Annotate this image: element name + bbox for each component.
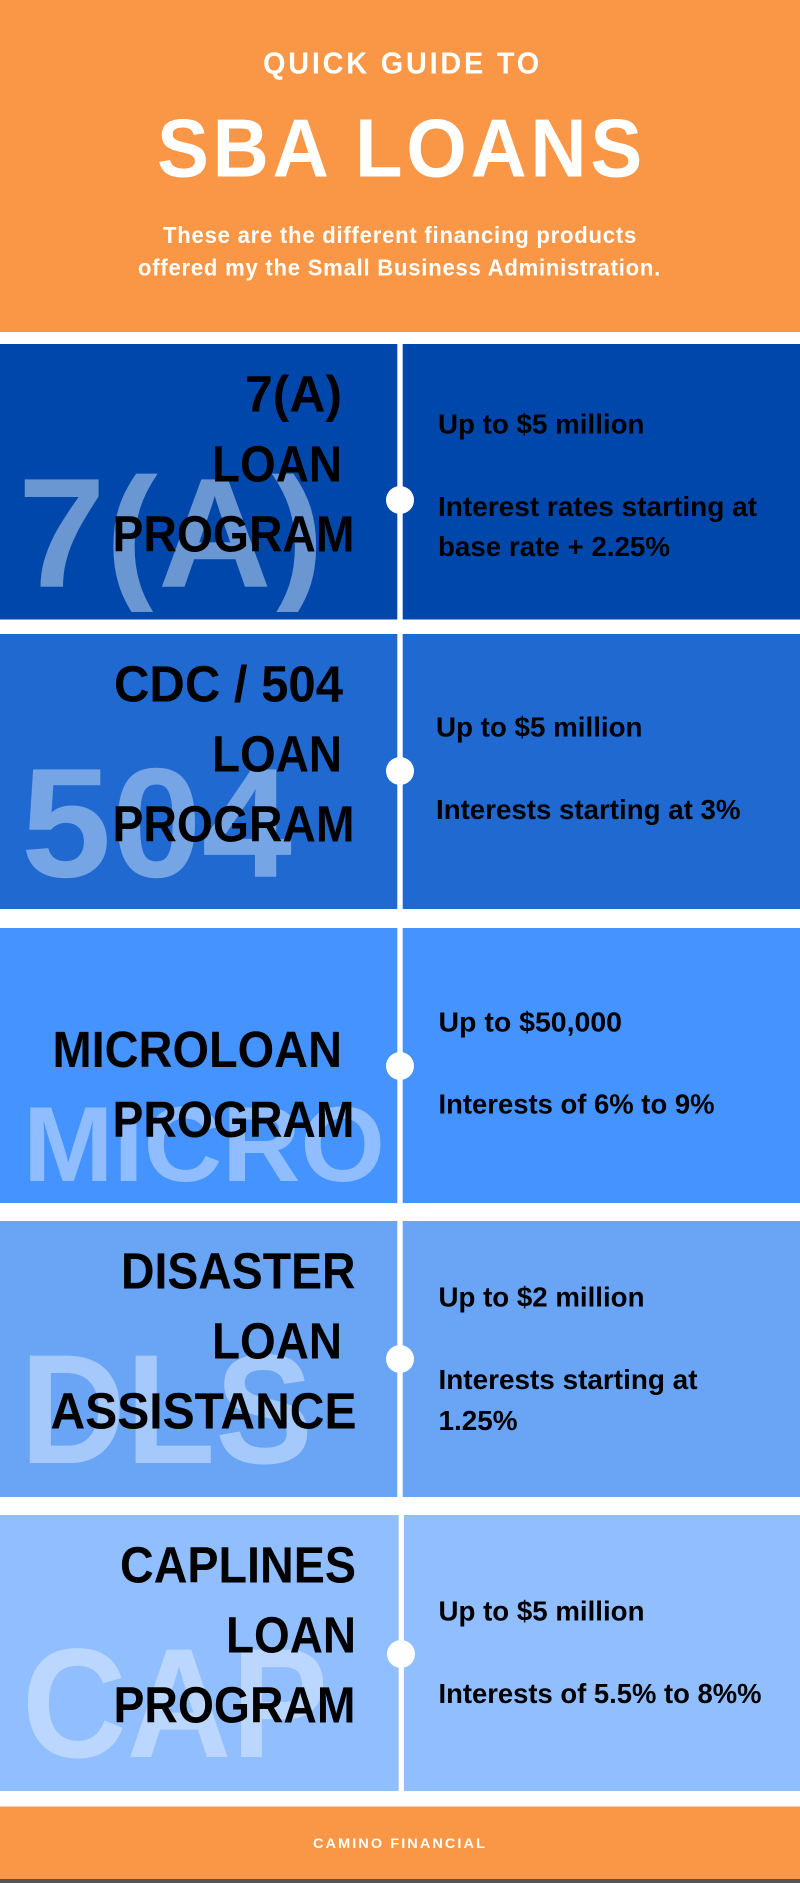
program name: MICROLOAN [52,1021,342,1078]
watermark: MICRO: MICRO [23,1084,385,1204]
panel: disaster loan assistance [0,1221,800,1497]
watermark: 504: 504 [21,737,292,911]
program name: LOAN [226,1607,356,1664]
program name: DISASTER [121,1243,356,1300]
footer text: CAMINO FINANCIAL [313,1835,487,1851]
program name: 7(A) [245,366,342,423]
program name: ASSISTANCE [50,1383,356,1440]
program name [50,1243,356,1440]
loan details: Up to $5 million [438,1596,644,1627]
program name: PROGRAM [112,1091,354,1148]
intro text: These are the different financing products [163,222,637,248]
program name: CDC / 504 [114,656,344,713]
loan details: Up to $5 million [436,712,642,743]
loan details: Up to $5 million [438,408,644,440]
program name: PROGRAM [112,506,354,563]
panel: footer [0,1806,800,1879]
panel: header [0,0,800,332]
title: SBA LOANS [157,102,646,194]
program name: CAPLINES [120,1536,356,1593]
loan details: Interests of 6% to 9% [438,1089,715,1120]
program name [112,366,354,563]
program name: PROGRAM [114,1677,356,1734]
panel: caplines loan program [0,1515,800,1791]
loan details: 1.25% [438,1405,518,1436]
loan details [438,1007,715,1120]
loan details: Interest rates starting at [438,491,757,522]
loan details [436,712,741,825]
program name: LOAN [212,436,342,493]
program name: PROGRAM [112,796,354,853]
panel: CDC / 504 loan program [0,634,800,911]
panel: 7(A) loan program [0,344,800,621]
loan details [438,1282,698,1436]
program name [112,656,354,853]
eyebrow: quick guide to: QUICK GUIDE TO [263,46,542,80]
loan details: base rate + 2.25% [438,531,670,562]
program name [114,1536,356,1734]
program name: LOAN [212,1313,342,1370]
watermark: 7(A): 7(A) [18,447,324,621]
watermark: DLS: DLS [20,1323,313,1497]
loan details: Up to $50,000 [438,1007,622,1038]
loan details [438,408,757,562]
loan details: Up to $2 million [438,1282,644,1313]
timeline: divider line and dots [386,344,415,1791]
program name: LOAN [212,726,342,783]
intro text: offered my the Small Business Administration. [138,254,661,280]
loan details: Interests starting at 3% [436,794,741,825]
loan details: Interests of 5.5% to 8%% [438,1678,762,1709]
watermark: CAP: CAP [22,1617,328,1791]
intro text [138,222,661,280]
loan details: Interests starting at [438,1364,698,1395]
loan details [438,1596,762,1709]
program name [52,1021,354,1148]
panel: microloan program [0,928,800,1204]
